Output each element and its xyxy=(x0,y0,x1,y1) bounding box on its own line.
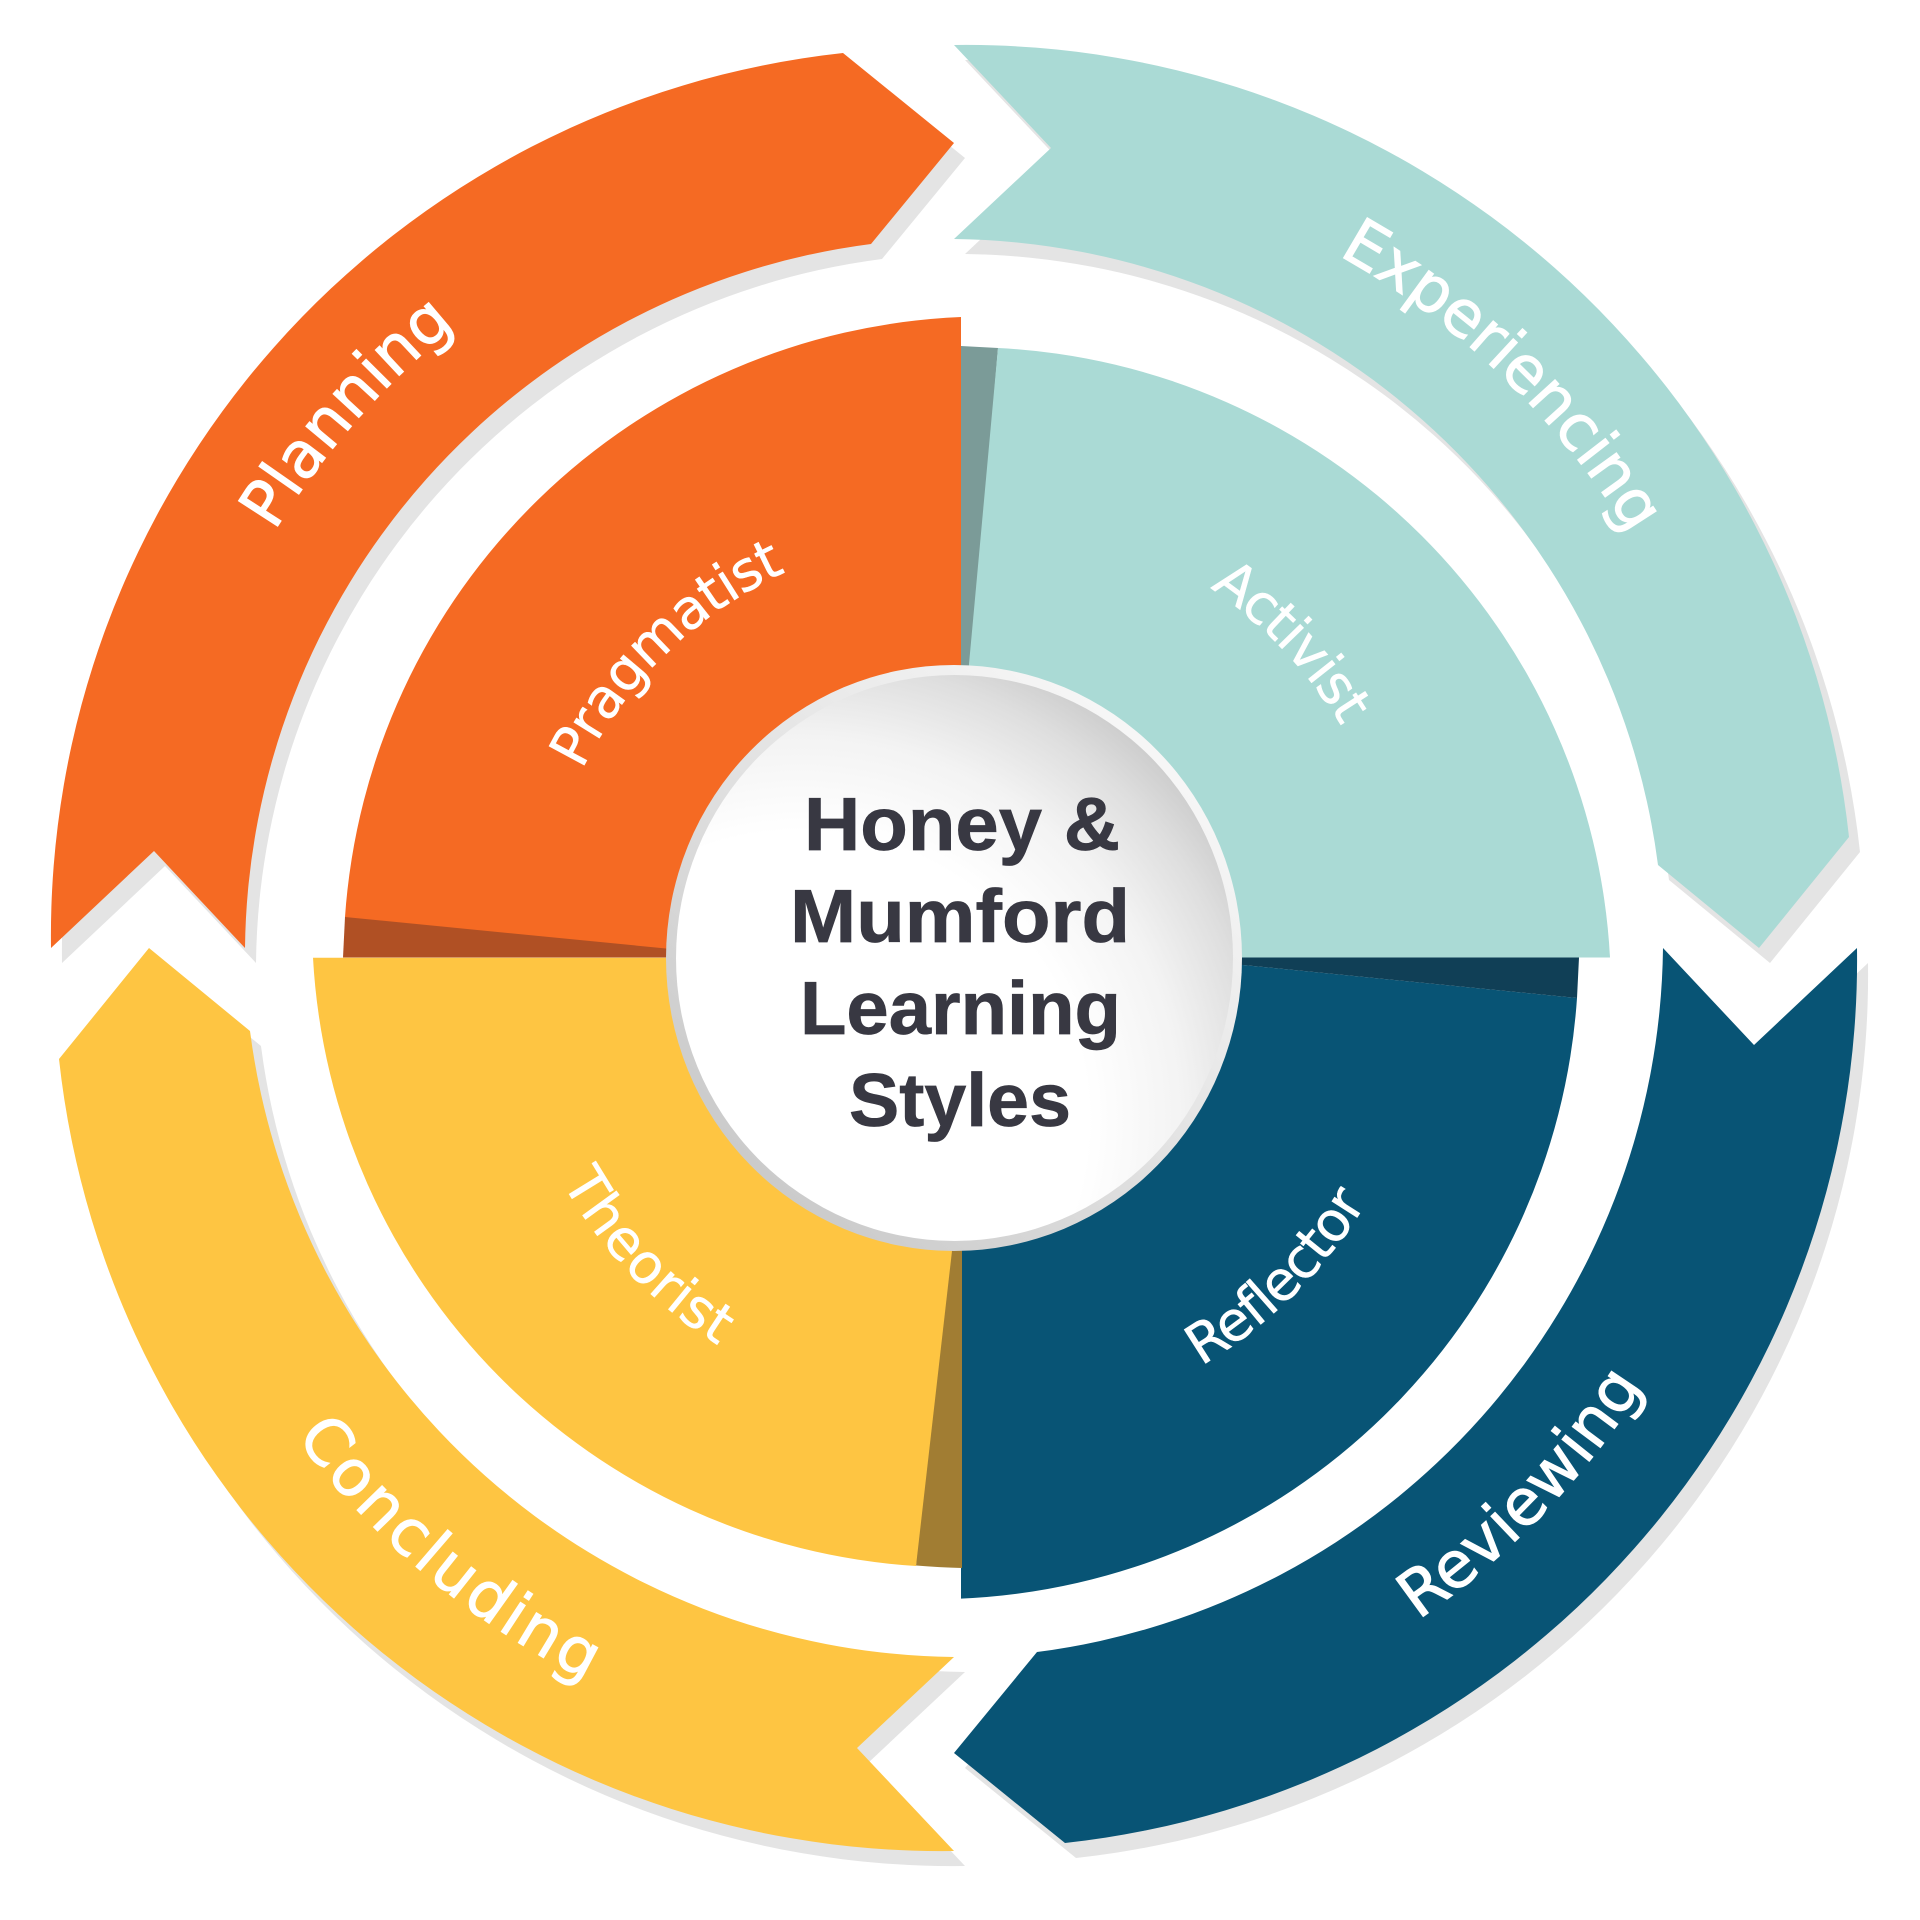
label: Planning: Planning xyxy=(238,302,454,527)
arrow: Reviewing xyxy=(954,948,1858,1843)
arrow: Concluding xyxy=(59,948,954,1852)
title xyxy=(790,782,1130,1142)
label: Theorist: Theorist xyxy=(568,1160,734,1346)
arrow: Planning xyxy=(50,53,954,948)
arrow: Experiencing xyxy=(954,44,1849,948)
title: Learning xyxy=(800,966,1121,1050)
title: Styles xyxy=(849,1058,1071,1142)
label: Experiencing: Experiencing xyxy=(1342,217,1657,532)
label: Reflector: Reflector xyxy=(1184,1186,1360,1364)
sector: Activist xyxy=(961,346,1610,958)
label: Activist: Activist xyxy=(1210,564,1368,726)
sector: Theorist xyxy=(313,958,962,1568)
label: Pragmatist: Pragmatist xyxy=(548,542,785,766)
sector: Reflector xyxy=(961,958,1579,1599)
label: Concluding: Concluding xyxy=(305,1418,598,1686)
title: Mumford xyxy=(790,874,1130,958)
sector: Pragmatist xyxy=(343,317,961,958)
title: Honey & xyxy=(804,782,1120,866)
center circle xyxy=(666,665,1242,1251)
label: Reviewing: Reviewing xyxy=(1395,1370,1647,1618)
